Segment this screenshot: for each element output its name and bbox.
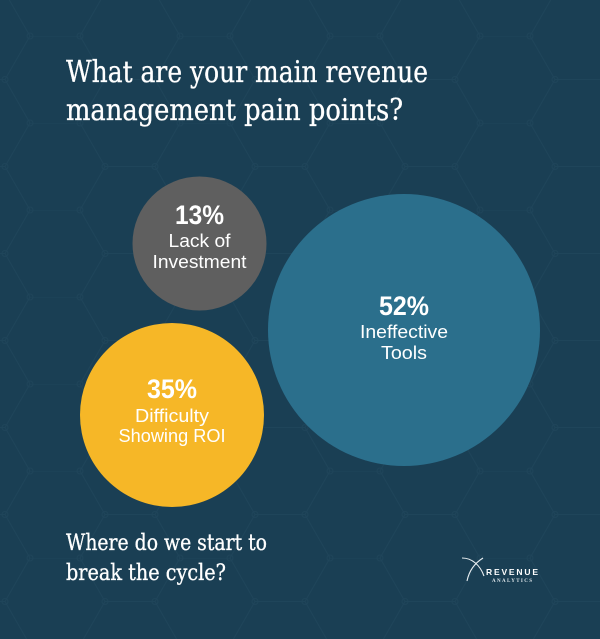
- bubble: 52% ineffective tools: 52%: [379, 291, 429, 321]
- logo: Revenue Analytics: [462, 558, 538, 584]
- title: [66, 55, 428, 128]
- closing question: break the cycle?: [66, 561, 226, 586]
- bubble: 35% difficulty showing ROI: Showing ROI: [118, 425, 226, 446]
- bubble: 35% difficulty showing ROI: 35%: [147, 374, 197, 404]
- bubble: 52% ineffective tools: [268, 194, 540, 466]
- bubble: 35% difficulty showing ROI: Difficulty: [135, 405, 210, 426]
- title: management pain points?: [66, 93, 403, 128]
- closing question: Where do we start to: [66, 531, 267, 556]
- icon: crossing arcs: [462, 558, 484, 581]
- closing question: [66, 531, 267, 586]
- bubble: 13% lack of investment: Lack of: [168, 230, 231, 251]
- bubble: 35% difficulty showing ROI: [80, 323, 264, 507]
- bubble: 13% lack of investment: Investment: [152, 251, 246, 272]
- bubble: 13% lack of investment: 13%: [175, 200, 224, 230]
- bubble: 52% ineffective tools: Tools: [381, 342, 427, 363]
- title: What are your main revenue: [66, 55, 428, 90]
- bubble: 13% lack of investment: [132, 176, 266, 310]
- logo: Revenue Analytics: REVENUE: [486, 567, 538, 577]
- logo: Revenue Analytics: ANALYTICS: [492, 579, 532, 584]
- bubble: 52% ineffective tools: Ineffective: [360, 321, 448, 342]
